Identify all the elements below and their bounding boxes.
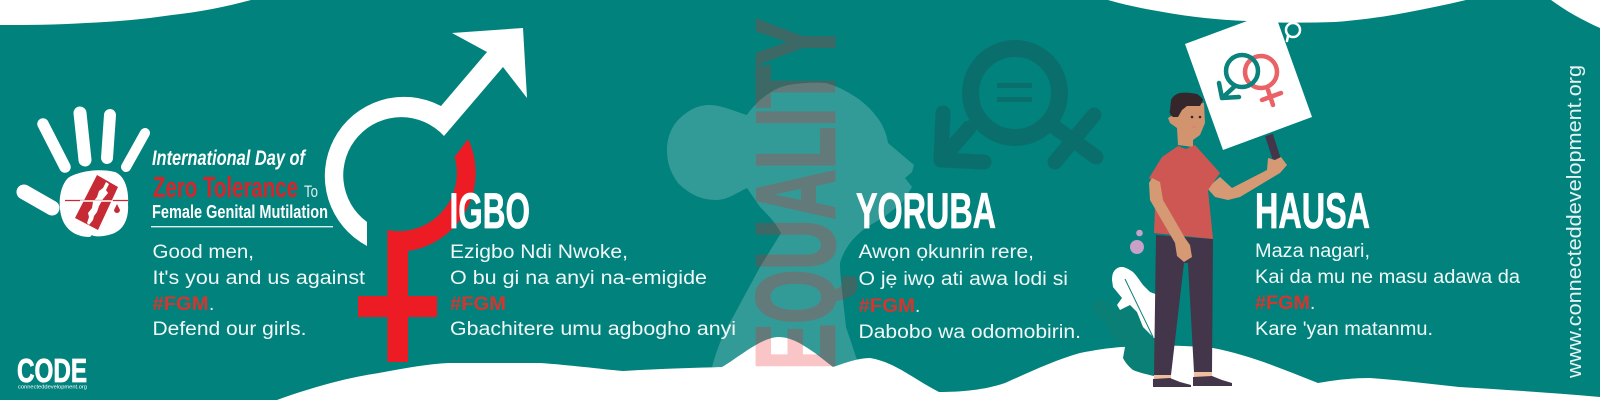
- shirt: [1149, 145, 1220, 239]
- ankles: [1154, 372, 1212, 379]
- white wave: top left: [0, 0, 251, 25]
- text block: igbo: Ezigbo Ndi Nwoke,: [450, 242, 628, 263]
- icon: gender equality symbol: [941, 48, 1096, 162]
- text block: hausa: .: [1310, 293, 1315, 314]
- text block: igbo: #FGM: [450, 294, 506, 315]
- text block: english: It's you and us against: [152, 268, 366, 289]
- heading block: international day: [151, 147, 333, 227]
- text block: yoruba: #FGM: [858, 296, 915, 317]
- smile: [1192, 126, 1196, 127]
- neck and face: [1168, 103, 1205, 147]
- right arm and hand: [1207, 157, 1287, 200]
- shoes: [1153, 376, 1232, 387]
- heading block: international day: To: [304, 182, 318, 201]
- text block: igbo: [450, 242, 736, 340]
- text block: english: Good men,: [152, 242, 254, 263]
- text block: igbo: O bu gi na anyi na-emigide: [450, 268, 707, 289]
- heading: yoruba: YORUBA: [856, 183, 996, 239]
- eyes: [1192, 116, 1200, 118]
- text block: english: #FGM: [152, 294, 208, 315]
- illustration: man holding sign: [1149, 11, 1312, 387]
- text block: yoruba: [858, 242, 1081, 343]
- logo: CODE: connecteddevelopment.org: [18, 384, 87, 390]
- white wave: top centre right: [1108, 0, 1466, 23]
- silhouette: woman's head: [667, 83, 914, 380]
- heading block: international day: Zero Tolerance: [153, 172, 298, 204]
- text block: hausa: Maza nagari,: [1255, 241, 1370, 262]
- text block: hausa: Kare 'yan matanmu.: [1255, 319, 1433, 340]
- white wave: top right corner: [1551, 0, 1600, 28]
- illustration: plant: [1092, 230, 1158, 376]
- heading block: international day: International Day of: [152, 147, 307, 170]
- text block: yoruba: .: [915, 296, 920, 317]
- text block: hausa: #FGM: [1255, 293, 1310, 314]
- text block: yoruba: Dabobo wa odomobirin.: [858, 322, 1081, 343]
- text block: hausa: [1255, 241, 1520, 340]
- heading: hausa: HAUSA: [1255, 183, 1370, 239]
- logo: CODE: CODE: [17, 352, 87, 389]
- text block: english: [152, 242, 366, 340]
- heading: igbo: IGBO: [450, 183, 530, 239]
- text block: hausa: Kai da mu ne masu adawa da: [1255, 267, 1520, 288]
- text block: yoruba: O jẹ iwọ ati awa lodi si: [858, 269, 1068, 290]
- text block: english: Defend our girls.: [152, 319, 306, 340]
- icon: large male symbol: [325, 28, 527, 246]
- text block: igbo: Gbachitere umu agbogho anyi: [450, 319, 736, 340]
- pants: [1154, 235, 1213, 375]
- white wave: bottom: [277, 337, 1600, 400]
- hair: [1170, 93, 1203, 117]
- sign board: [1185, 11, 1312, 150]
- sign stick: [1269, 135, 1277, 160]
- heading block: international day: Female Genital Mutilation: [152, 202, 328, 222]
- icon: hand with razor blade: [24, 113, 145, 237]
- website url, vertical: www.connecteddevelopment.org: [1564, 65, 1586, 379]
- icon: large female symbol: [358, 139, 476, 362]
- icon: sign gender symbols: [1219, 23, 1300, 105]
- left arm: [1149, 178, 1192, 262]
- text block: english: .: [209, 294, 214, 315]
- text block: yoruba: Awọn ọkunrin rere,: [858, 242, 1034, 263]
